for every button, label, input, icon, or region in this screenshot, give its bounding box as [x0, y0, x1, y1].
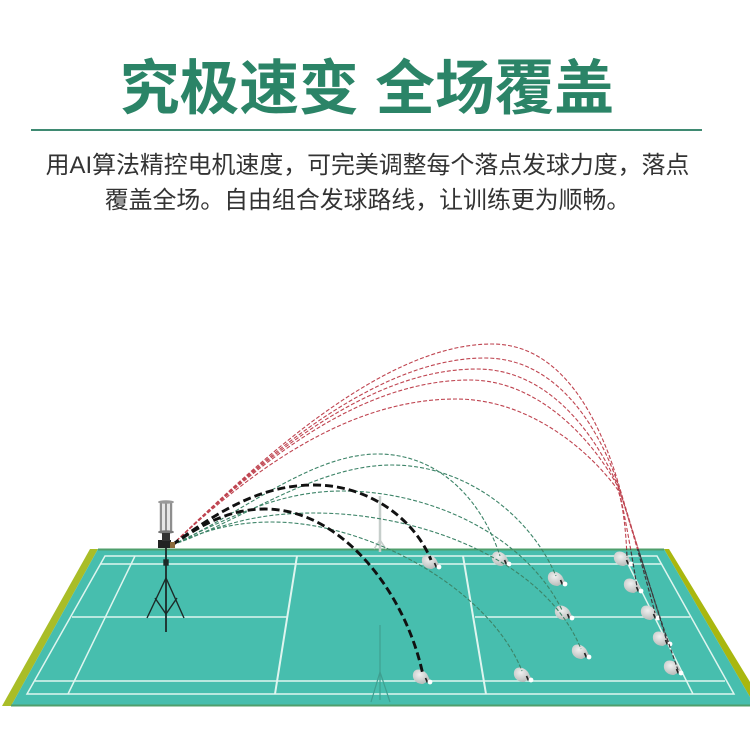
court surface [2, 549, 750, 706]
title: 究极速变 全场覆盖 [120, 55, 614, 122]
black highlighted trajectories [172, 485, 431, 675]
front net post [371, 625, 390, 702]
back net post [374, 496, 386, 552]
badminton court scene [2, 344, 750, 706]
tripod [147, 548, 184, 632]
title underline [31, 129, 702, 131]
description text: 用AI算法精控电机速度，可完美调整每个落点发球力度，落点 [46, 152, 689, 179]
description text [46, 152, 689, 214]
court lines [27, 556, 734, 694]
ball machine on tripod [147, 500, 184, 632]
green mid trajectories [172, 454, 581, 671]
shuttlecocks [413, 552, 683, 684]
machine head [158, 540, 171, 548]
red long trajectories [172, 344, 678, 670]
description text: 覆盖全场。自由组合发球路线，让训练更为顺畅。 [105, 187, 630, 214]
ball tube [158, 500, 174, 534]
red trajectories over the court [626, 549, 678, 670]
